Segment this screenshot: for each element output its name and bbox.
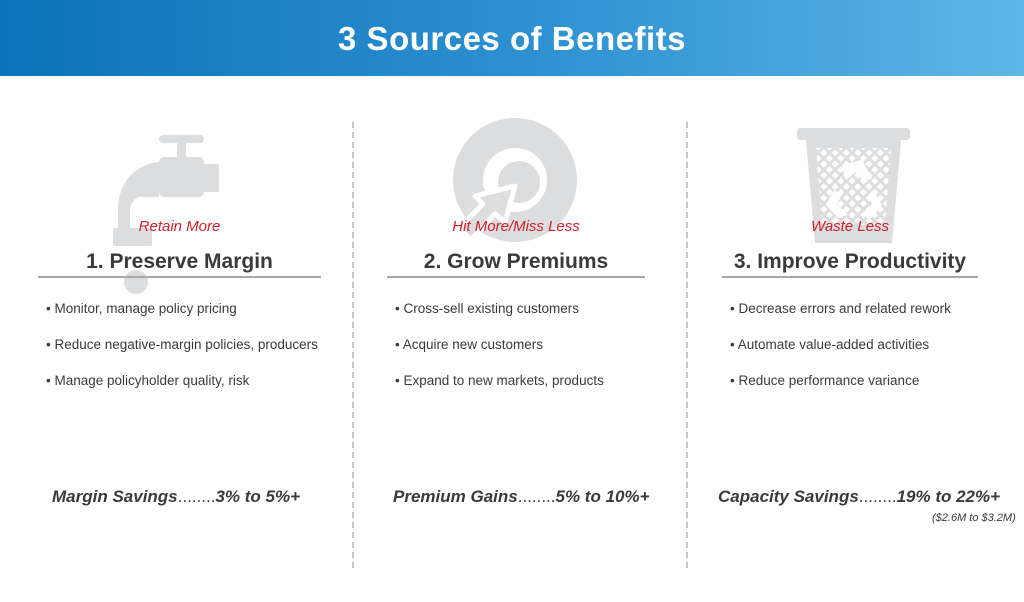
- bullets: [46, 301, 318, 388]
- heading: 2. Grow Premiums: [424, 250, 608, 273]
- heading: 3. Improve Productivity: [734, 250, 966, 273]
- panel: grow premiums: [387, 118, 650, 506]
- stat: Premium Gains........5% to 10%+: [393, 487, 650, 506]
- bullets: • Manage policyholder quality, risk: [46, 373, 249, 388]
- stat: Margin Savings........3% to 5%+: [52, 487, 300, 506]
- heading: 1. Preserve Margin: [86, 250, 273, 273]
- bullets: • Reduce negative-margin policies, producers: [46, 337, 318, 352]
- bullets: [395, 301, 604, 388]
- bullets: [730, 301, 951, 388]
- stat note: ($2.6M to $3.2M): [932, 512, 1016, 524]
- bullets: • Decrease errors and related rework: [730, 301, 951, 316]
- panel: preserve margin: [38, 135, 321, 506]
- bullets: • Monitor, manage policy pricing: [46, 301, 237, 316]
- bullets: • Reduce performance variance: [730, 373, 919, 388]
- header banner: [0, 0, 1024, 76]
- tagline: Hit More/Miss Less: [452, 218, 580, 235]
- icon: faucet: [113, 135, 219, 294]
- panel: improve productivity: [718, 128, 1016, 524]
- title: 3 Sources of Benefits: [338, 20, 686, 57]
- bullets: • Acquire new customers: [395, 337, 543, 352]
- icon: target: [453, 118, 577, 242]
- tagline: Waste Less: [811, 218, 889, 235]
- stat: Capacity Savings........19% to 22%+: [718, 487, 1000, 506]
- bullets: • Cross-sell existing customers: [395, 301, 579, 316]
- bullets: • Expand to new markets, products: [395, 373, 604, 388]
- bullets: • Automate value-added activities: [730, 337, 929, 352]
- icon: recycle bin: [797, 128, 910, 243]
- tagline: Retain More: [139, 218, 220, 235]
